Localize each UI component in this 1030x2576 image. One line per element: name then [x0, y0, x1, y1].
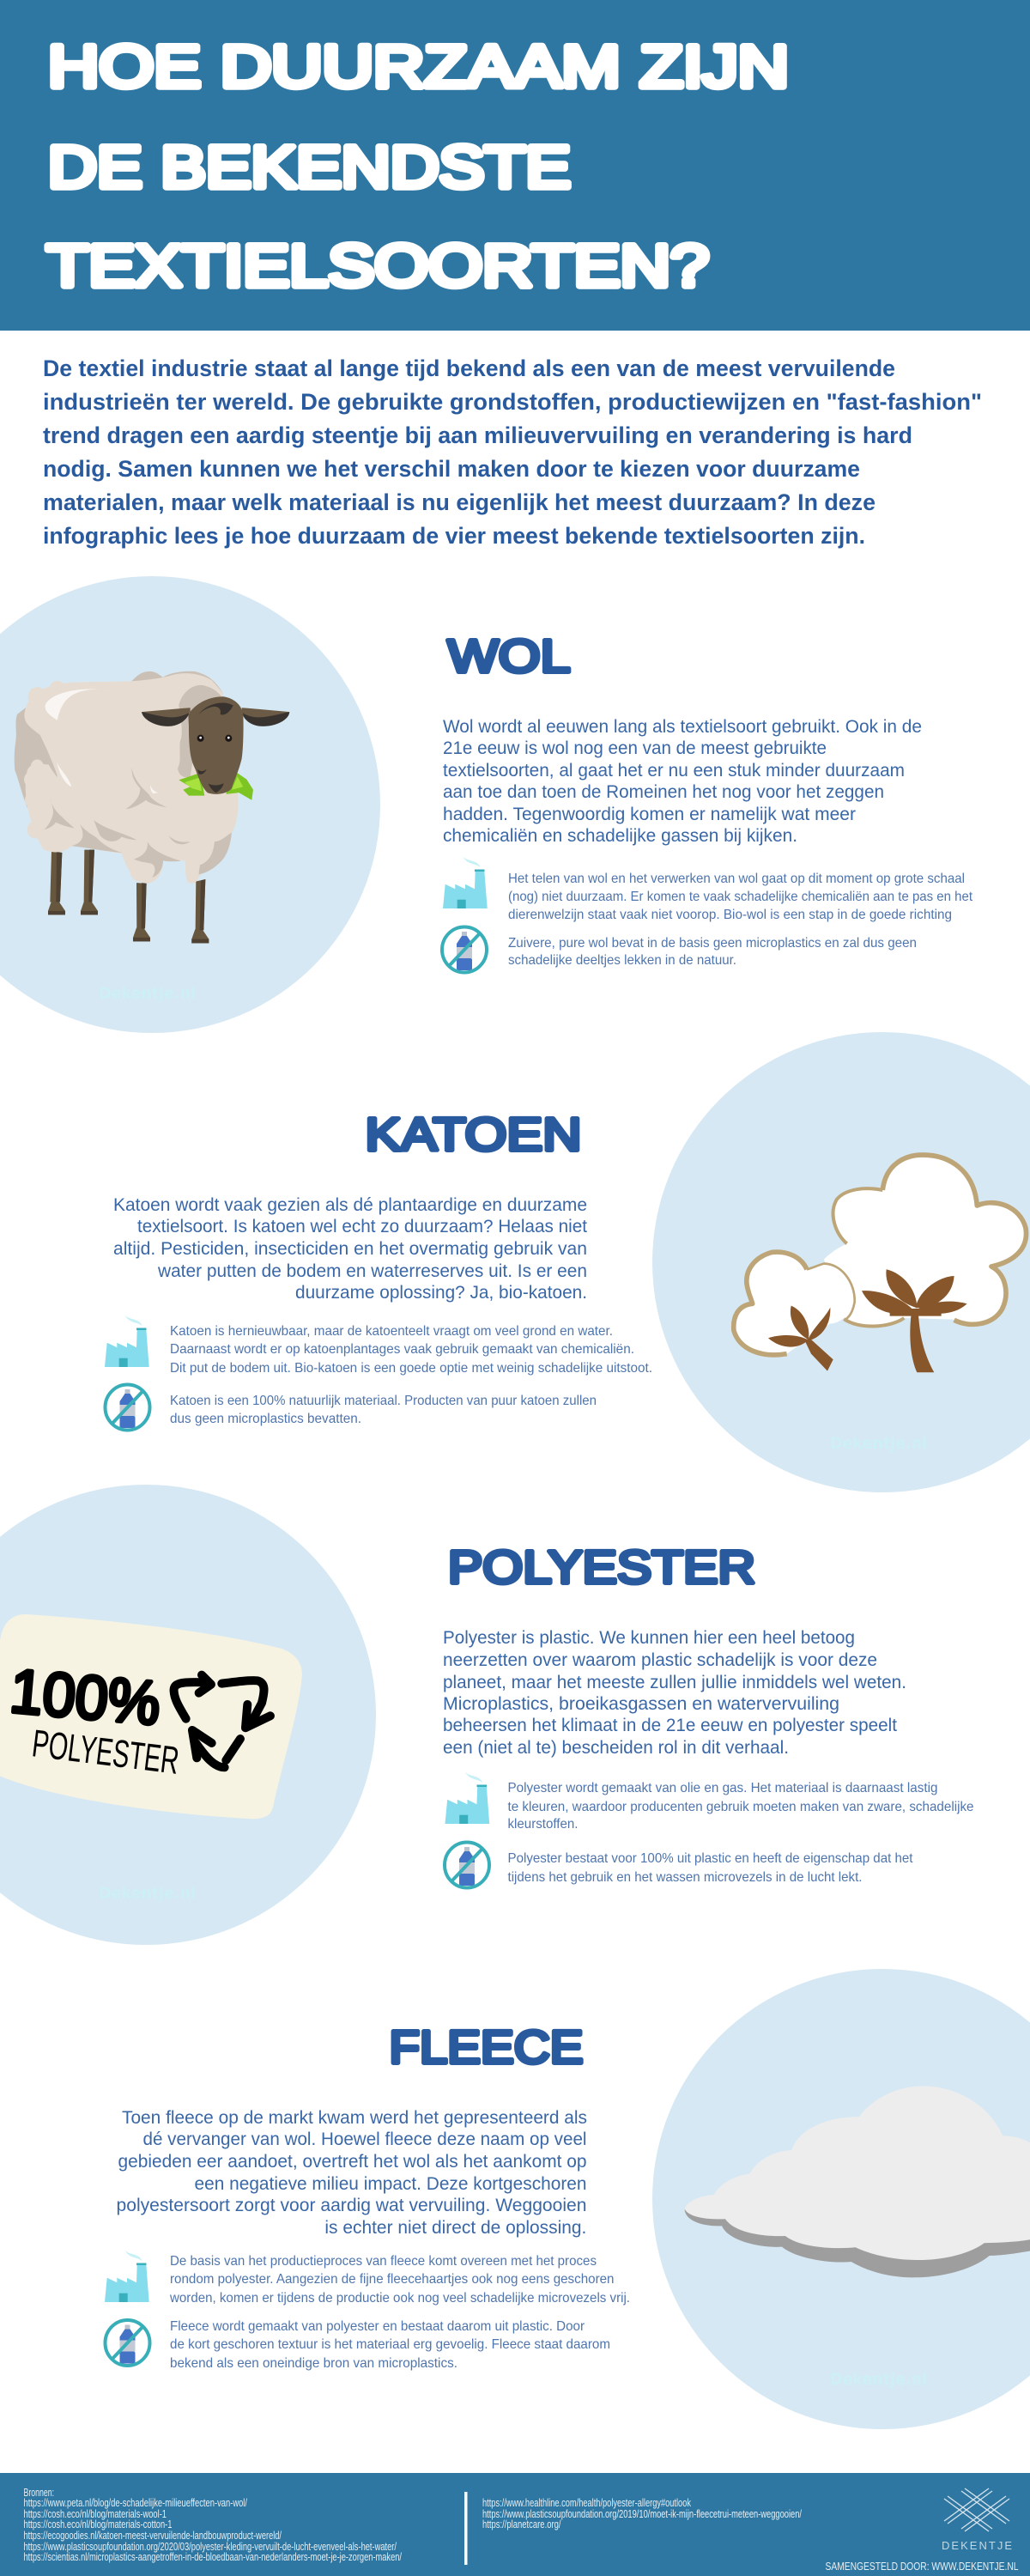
fact: microplastics: tijdens het gebruik en het wassen microvezels in de lucht lekt. — [508, 1870, 862, 1885]
fact: production: dierenwelzijn staat vaak niet voorop. Bio-wol is een stap in de goede richting — [508, 908, 952, 922]
watermark: Dekentje.nl — [99, 984, 196, 1003]
body text: katoen: water putten de bodem en waterreserves uit. Is er een — [157, 1261, 587, 1281]
intro text: materialen, maar welk materiaal is nu eigenlijk het meest duurzaam? In deze — [43, 489, 876, 515]
fact: production: Het telen van wol en het verwerken van wol gaat op dit moment op grote schaal — [508, 872, 965, 886]
illustration: polyester label: POLYESTER — [30, 1721, 181, 1783]
icon: no plastic — [445, 1843, 489, 1887]
fact: production: Polyester wordt gemaakt van olie en gas. Het materiaal is daarnaast lastig — [508, 1781, 937, 1795]
body text: fleece: is echter niet direct de oplossing. — [324, 2218, 586, 2238]
fact: production: rondom polyester. Aangezien de fijne fleecehaartjes ook nog eens geschoren — [170, 2272, 615, 2287]
body text: katoen: duurzame oplossing? Ja, bio-katoen. — [295, 1283, 587, 1303]
panel: polyester — [0, 1485, 974, 1945]
body text: fleece — [117, 2108, 587, 2238]
sources left column: https://www.peta.nl/blog/de-schadelijke-milieueffecten-van-wol/ — [24, 2497, 247, 2509]
body text: fleece: polyestersoort zorgt voor aardig wat vervuiling. Weggooien — [117, 2196, 587, 2215]
body text: polyester: beheersen het klimaat in de 21e eeuw en polyester speelt — [443, 1716, 897, 1735]
fact: production: Daarnaast wordt er op katoenplantages vaak gebruik gemaakt van chemicaliën. — [170, 1342, 634, 1357]
fleece background circle — [652, 1969, 1030, 2429]
sources right column: https://www.healthline.com/health/polyester-allergy#outlook — [482, 2497, 692, 2509]
title: HOE DUURZAAM ZIJN — [48, 33, 789, 100]
fact: microplastics — [508, 1851, 913, 1885]
heading: polyester: POLYESTER — [448, 1542, 755, 1594]
body text: katoen — [113, 1195, 587, 1303]
title — [46, 33, 789, 299]
fact: production: Katoen is hernieuwbaar, maar de katoenteelt vraagt om veel grond en water. — [170, 1324, 613, 1339]
icon: no plastic — [105, 2320, 149, 2366]
icon: factory — [443, 855, 488, 908]
body text: wol: textielsoorten, al gaat het er nu een stuk minder duurzaam — [443, 761, 905, 781]
body text: katoen: textielsoort. Is katoen wel echt zo duurzaam? Helaas niet — [137, 1217, 587, 1236]
footer — [0, 2473, 1030, 2576]
heading: wol: WOL — [448, 630, 570, 682]
sources left column: https://www.plasticsoupfoundation.org/2020/03/polyester-kleding-vervuilt-de-lucht-evenveel-als-het-water/ — [24, 2541, 397, 2553]
fact: production: (nog) niet duurzaam. Er komen te vaak schadelijke chemicaliën aan te pas en het — [508, 890, 973, 904]
fact: microplastics: bekend als een oneindige bron van microplastics. — [170, 2356, 457, 2371]
title: TEXTIELSOORTEN? — [46, 233, 709, 299]
icon: no plastic — [442, 927, 487, 972]
fact: production — [170, 1324, 652, 1376]
body text: fleece: dé vervanger van wol. Hoewel fleece deze naam op veel — [142, 2129, 587, 2149]
icon: factory — [105, 1314, 149, 1367]
body text: polyester: neerzetten over waarom plastic schadelijk is voor deze — [443, 1650, 877, 1670]
sources right column — [482, 2497, 802, 2530]
wol background circle — [0, 576, 380, 1033]
body text: wol: Wol wordt al eeuwen lang als textielsoort gebruikt. Ook in de — [443, 717, 922, 737]
fact: microplastics: Polyester bestaat voor 100% uit plastic en heeft de eigenschap dat het — [508, 1851, 913, 1866]
fact: production — [508, 872, 973, 922]
watermark: Dekentje.nl — [830, 1434, 927, 1453]
fact: microplastics: Fleece wordt gemaakt van polyester en bestaat daarom uit plastic. Door — [170, 2319, 585, 2334]
panel: wol — [0, 576, 973, 1033]
fact: production: Dit put de bodem uit. Bio-katoen is een goede optie met weinig schadelijke uitstoot. — [170, 1361, 652, 1376]
body text: polyester — [443, 1628, 906, 1758]
sources left column: Bronnen: — [24, 2487, 54, 2499]
sources right column: https://planetcare.org/ — [482, 2518, 561, 2530]
heading: katoen: KATOEN — [366, 1109, 582, 1161]
intro text: trend dragen een aardig steentje bij aan milieuvervuiling en verandering is hard — [43, 422, 912, 448]
fact: microplastics: dus geen microplastics bevatten. — [170, 1412, 361, 1426]
logo: dekentje — [944, 2488, 1009, 2531]
fact: microplastics: Zuivere, pure wol bevat in de basis geen microplastics en zal dus geen — [508, 936, 917, 951]
watermark: Dekentje.nl — [830, 2370, 927, 2389]
panel: fleece — [105, 1969, 1030, 2429]
intro text: infographic lees je hoe duurzaam de vier meest bekende textielsoorten zijn. — [43, 523, 865, 549]
title: DE BEKENDSTE — [48, 134, 571, 200]
sources left column: https://ecogoodies.nl/katoen-meest-vervuilende-landbouwproduct-wereld/ — [24, 2530, 282, 2542]
illustration: polyester label: 100% — [8, 1657, 163, 1738]
icon: factory — [445, 1771, 489, 1824]
illustration: cloud — [685, 2086, 1030, 2277]
body text: wol: aan toe dan toen de Romeinen het nog voor het zeggen — [443, 782, 884, 802]
body text: wol: hadden. Tegenwoordig komen er namelijk wat meer — [443, 805, 856, 824]
fact: production — [508, 1781, 974, 1832]
fact: microplastics: de kort geschoren textuur is het materiaal erg gevoelig. Fleece staat daarom — [170, 2337, 610, 2352]
sources left column: https://cosh.eco/nl/blog/materials-cotton-1 — [24, 2518, 173, 2530]
body text: katoen: Katoen wordt vaak gezien als dé plantaardige en duurzame — [113, 1195, 587, 1215]
body text: fleece: gebieden eer aandoet, overtreft het wol als het aankomt op — [118, 2152, 587, 2172]
intro text: De textiel industrie staat al lange tijd bekend als een van de meest vervuilende — [43, 355, 895, 381]
intro text: nodig. Samen kunnen we het verschil maken door te kiezen voor duurzame — [43, 456, 860, 482]
icon: factory — [105, 2249, 149, 2302]
body text: fleece: Toen fleece op de markt kwam werd het gepresenteerd als — [122, 2108, 587, 2128]
panel: katoen — [105, 1032, 1030, 1492]
polyester background circle — [0, 1485, 376, 1945]
fact: microplastics — [170, 2319, 610, 2371]
body text: polyester: Microplastics, broeikasgassen en watervervuiling — [443, 1694, 839, 1714]
heading: fleece: FLEECE — [390, 2021, 584, 2073]
sources right column: https://www.plasticsoupfoundation.org/2019/10/moet-ik-mijn-fleecetrui-meteen-weggooien/ — [482, 2508, 802, 2520]
fact: production: kleurstoffen. — [508, 1817, 579, 1832]
fact: production: worden, komen er tijdens de productie ook nog veel schadelijke microvezels vrij. — [169, 2291, 630, 2306]
intro text — [43, 355, 982, 549]
body text: katoen: altijd. Pesticiden, insecticiden en het overmatig gebruik van — [113, 1239, 587, 1259]
body text: polyester: Polyester is plastic. We kunnen hier een heel betoog — [443, 1628, 855, 1648]
logo wordmark: DEKENTJE — [942, 2539, 1012, 2552]
fact: microplastics — [508, 936, 917, 968]
header banner — [0, 0, 1030, 331]
body text: polyester: een (niet al te) bescheiden rol in dit verhaal. — [443, 1738, 789, 1758]
fact: production: De basis van het productieproces van fleece komt overeen met het proces — [170, 2254, 597, 2269]
body text: wol: 21e eeuw is wol nog een van de meest gebruikte — [443, 738, 827, 758]
katoen background circle — [652, 1032, 1030, 1492]
sources left column — [24, 2487, 402, 2563]
fact: microplastics: Katoen is een 100% natuurlijk materiaal. Producten van puur katoen zullen — [170, 1394, 597, 1408]
illustration: polyester label — [0, 1614, 302, 1819]
sources left column: https://scientias.nl/microplastics-aangetroffen-in-de-bloedbaan-van-nederlanders-moet-je-je-zorgen-maken/ — [24, 2551, 402, 2563]
illustration: sheep — [15, 671, 289, 943]
sources left column: https://cosh.eco/nl/blog/materials-wool-1 — [24, 2508, 167, 2520]
watermark: Dekentje.nl — [99, 1884, 196, 1903]
fact: microplastics — [170, 1394, 597, 1426]
body text: polyester: planeet, maar het meeste zullen jullie inmiddels wel weten. — [443, 1673, 906, 1692]
icon: no plastic — [105, 1384, 149, 1431]
fact: production — [169, 2254, 630, 2306]
body text: wol — [443, 717, 922, 846]
body text: wol: chemicaliën en schadelijke gassen bij kijken. — [443, 826, 797, 846]
fact: production: te kleuren, waardoor producenten gebruik moeten maken van zware, schadelijke — [508, 1800, 974, 1814]
intro text: industrieën ter wereld. De gebruikte grondstoffen, productiewijzen en "fast-fashion" — [43, 389, 982, 415]
fact: microplastics: schadelijke deeltjes lekken in de natuur. — [508, 953, 736, 968]
illustration: cotton — [734, 1155, 1027, 1372]
body text: fleece: een negatieve milieu impact. Deze kortgeschoren — [194, 2174, 587, 2194]
